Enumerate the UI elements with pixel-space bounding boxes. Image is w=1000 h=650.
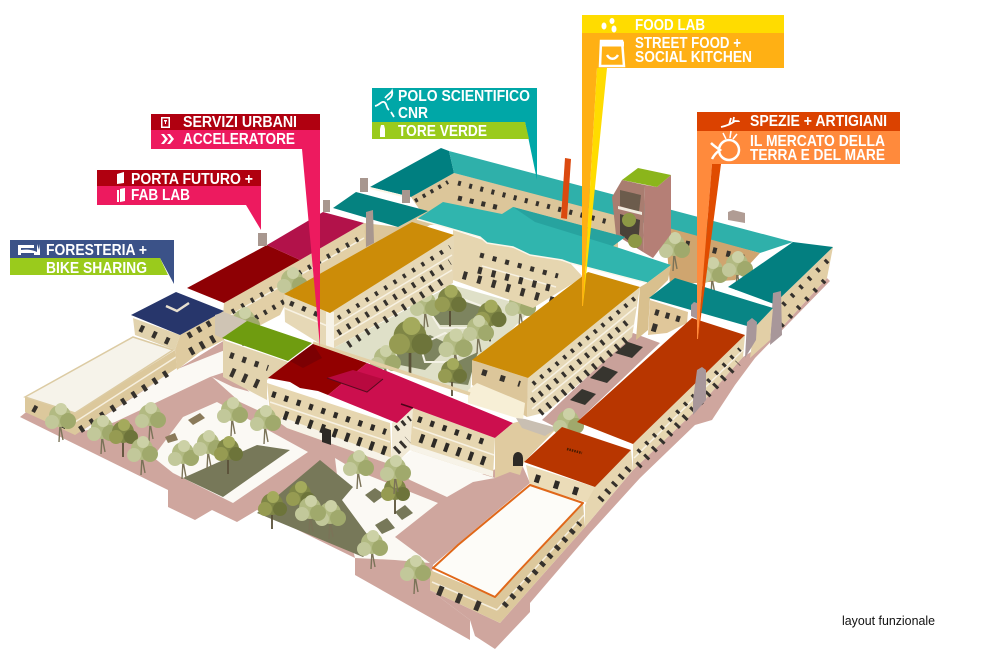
roof: northeast corner dark teal <box>728 242 833 304</box>
icon: double chevron <box>161 134 174 144</box>
north wing <box>370 148 793 253</box>
icon: smiling pot <box>600 41 624 66</box>
flat white roof <box>25 337 173 413</box>
icon: tower <box>380 125 385 137</box>
courtyard garden <box>330 285 536 396</box>
label: CNR: CNR <box>398 105 428 122</box>
green tower roof <box>622 168 671 187</box>
roof: navy <box>131 292 224 335</box>
wall: navy left face <box>133 318 180 350</box>
caption: layout funzionale: layout funzionale <box>842 614 935 628</box>
callout: Food Lab and Street Food <box>582 15 784 306</box>
label: Servizi Urbani: SERVIZI URBANI <box>183 114 297 131</box>
tree: yard <box>553 408 584 447</box>
wall: main return <box>392 408 413 467</box>
ground: paved site base <box>20 278 830 649</box>
small northwest wing <box>333 192 430 262</box>
label: Bike Sharing: BIKE SHARING <box>46 260 147 277</box>
roof: gold right <box>472 272 640 378</box>
window rows: central building <box>463 255 560 303</box>
windows: green block <box>230 355 268 368</box>
right garden <box>257 458 438 563</box>
west low wing <box>25 337 177 435</box>
central teal building <box>417 202 671 340</box>
windows: gold right end <box>482 372 520 384</box>
label: Il mercato: IL MERCATO DELLA <box>750 133 885 150</box>
window rows: gold left facade <box>338 247 450 345</box>
chimneys: upper roofline <box>258 178 410 247</box>
wall: gold right facade <box>527 287 640 417</box>
skylight: dark patch <box>290 344 322 368</box>
icon: sprout <box>375 91 394 117</box>
wall: small red-orange side <box>585 450 633 527</box>
chimney top right <box>728 210 745 223</box>
window rows: long facade <box>638 349 740 466</box>
wall: west wing facade <box>222 223 366 340</box>
label: Acceleratore: ACCELERATORE <box>183 131 295 148</box>
icon: bed <box>18 244 40 255</box>
label: Food Lab: FOOD LAB <box>635 17 705 34</box>
wall: main right facade <box>410 408 495 477</box>
front courtyard <box>392 450 495 497</box>
roof vent <box>567 449 582 453</box>
roof: northwest dark teal <box>333 192 428 227</box>
wall: gold left facade <box>330 235 454 350</box>
arches: terrace <box>504 523 580 606</box>
icon: branch <box>721 117 739 127</box>
white terrace with orange outline <box>433 485 583 597</box>
wall: navy right face <box>175 311 224 370</box>
white base: main right <box>410 444 493 477</box>
roof: front dark red <box>268 344 367 395</box>
tower with green roof <box>612 168 671 258</box>
icon: drops <box>602 18 616 32</box>
trees: northeast yard <box>659 232 753 296</box>
white base: main front <box>280 417 392 465</box>
window rows: east end <box>781 260 828 326</box>
window rows: gold right facade <box>532 298 635 413</box>
label: Street Food: STREET FOOD + <box>635 35 741 52</box>
trees: west wing courtyard <box>229 267 308 346</box>
callout: Foresteria and Bike Sharing <box>10 240 174 284</box>
wall: northeast courtyard wall <box>665 227 760 285</box>
window row: northeast wing <box>672 240 745 258</box>
northeast wing <box>659 227 833 345</box>
chimney: east <box>770 291 782 345</box>
roof: central teal <box>417 202 671 283</box>
wall: terrace facade <box>430 503 585 623</box>
wall: west low wing facade <box>25 350 177 435</box>
wall: east end facade <box>770 247 833 340</box>
skylight: shadow edge <box>327 378 383 392</box>
window rows: main right <box>418 419 490 463</box>
trees: front gardens <box>45 397 431 594</box>
icon: fish and sprout <box>711 131 739 160</box>
icon: fab lab <box>117 188 125 202</box>
connector walkway <box>215 312 247 338</box>
window rows: north wing <box>415 182 612 223</box>
roof: long red-orange <box>577 318 745 444</box>
gold right wing <box>468 272 640 420</box>
label: Social Kitchen: SOCIAL KITCHEN <box>635 49 752 66</box>
label: Polo Scientifico: POLO SCIENTIFICO <box>398 88 530 105</box>
windows: gold left end <box>290 303 326 318</box>
gold left wing <box>284 222 454 350</box>
chimneys: east facade <box>691 302 757 415</box>
parapet along front block <box>313 343 470 394</box>
windows: small red-orange front <box>535 478 582 493</box>
navy building <box>131 292 247 370</box>
roof: east teal <box>649 278 773 328</box>
wall: red-orange long facade <box>633 335 745 470</box>
label: Porta Futuro: PORTA FUTURO + <box>131 171 253 188</box>
roof: gold left <box>284 222 454 313</box>
orange vent stack <box>561 158 571 219</box>
callout: Porta Futuro and Fab Lab <box>97 170 261 230</box>
roof notch shadow <box>401 404 413 408</box>
label: Terra e del mare: TERRA E DEL MARE <box>750 147 885 164</box>
trees: courtyard <box>370 285 536 396</box>
label: Spezie: SPEZIE + ARTIGIANI <box>750 113 887 130</box>
window rows: main front <box>272 394 386 451</box>
wall: small red-orange front <box>526 465 595 505</box>
callout: Spezie and Mercato <box>697 112 900 339</box>
window rows: west wing <box>232 239 358 328</box>
front main building <box>222 321 513 477</box>
wall: under northwest roof <box>364 211 430 262</box>
left garden <box>153 402 308 503</box>
east teal wing <box>648 278 773 358</box>
arch: connector passage <box>513 452 523 466</box>
southeast connector <box>495 408 584 478</box>
callout: Polo Scientifico and Tore Verde <box>372 88 537 180</box>
windows: east teal wing <box>655 312 682 320</box>
roof: north wing dark corner <box>370 148 454 197</box>
roof: front crimson <box>328 363 513 438</box>
callout: Servizi Urbani and Acceleratore <box>151 114 320 347</box>
windows: navy right face <box>188 322 212 336</box>
wall: main front facade <box>267 383 392 465</box>
skylight: overlap patch <box>327 370 383 392</box>
wall: north wing facade <box>411 173 618 250</box>
label: Foresteria: FORESTERIA + <box>46 242 147 259</box>
east service yard with pergolas <box>542 333 660 432</box>
label: Tore Verde: TORE VERDE <box>398 123 487 140</box>
roof: dark red section <box>187 245 300 303</box>
arches: west low wing <box>80 370 172 430</box>
southeast building with white terrace <box>430 427 633 623</box>
label: Fab Lab: FAB LAB <box>131 187 190 204</box>
wall: connector behind gold <box>636 265 671 340</box>
red-orange long building <box>577 302 757 470</box>
west wing <box>187 212 366 346</box>
icon: book <box>161 117 170 128</box>
wall: gold right end <box>472 360 528 417</box>
roof: small red-orange <box>524 427 631 487</box>
wall: east teal wing facade <box>648 300 688 335</box>
roof: crimson section <box>267 212 364 260</box>
roof: green <box>222 321 312 361</box>
windows: navy left face <box>140 328 174 344</box>
icon: door <box>117 172 124 184</box>
cream terrace box <box>468 383 525 420</box>
wall: east teal end <box>750 308 773 358</box>
roof: north wing teal <box>449 151 793 253</box>
wall: gold left end <box>284 294 330 350</box>
main entrance door <box>322 427 331 445</box>
wall: green block facade <box>223 340 288 400</box>
wall: central building facade <box>453 230 583 308</box>
skylight: navy roof <box>166 303 189 311</box>
